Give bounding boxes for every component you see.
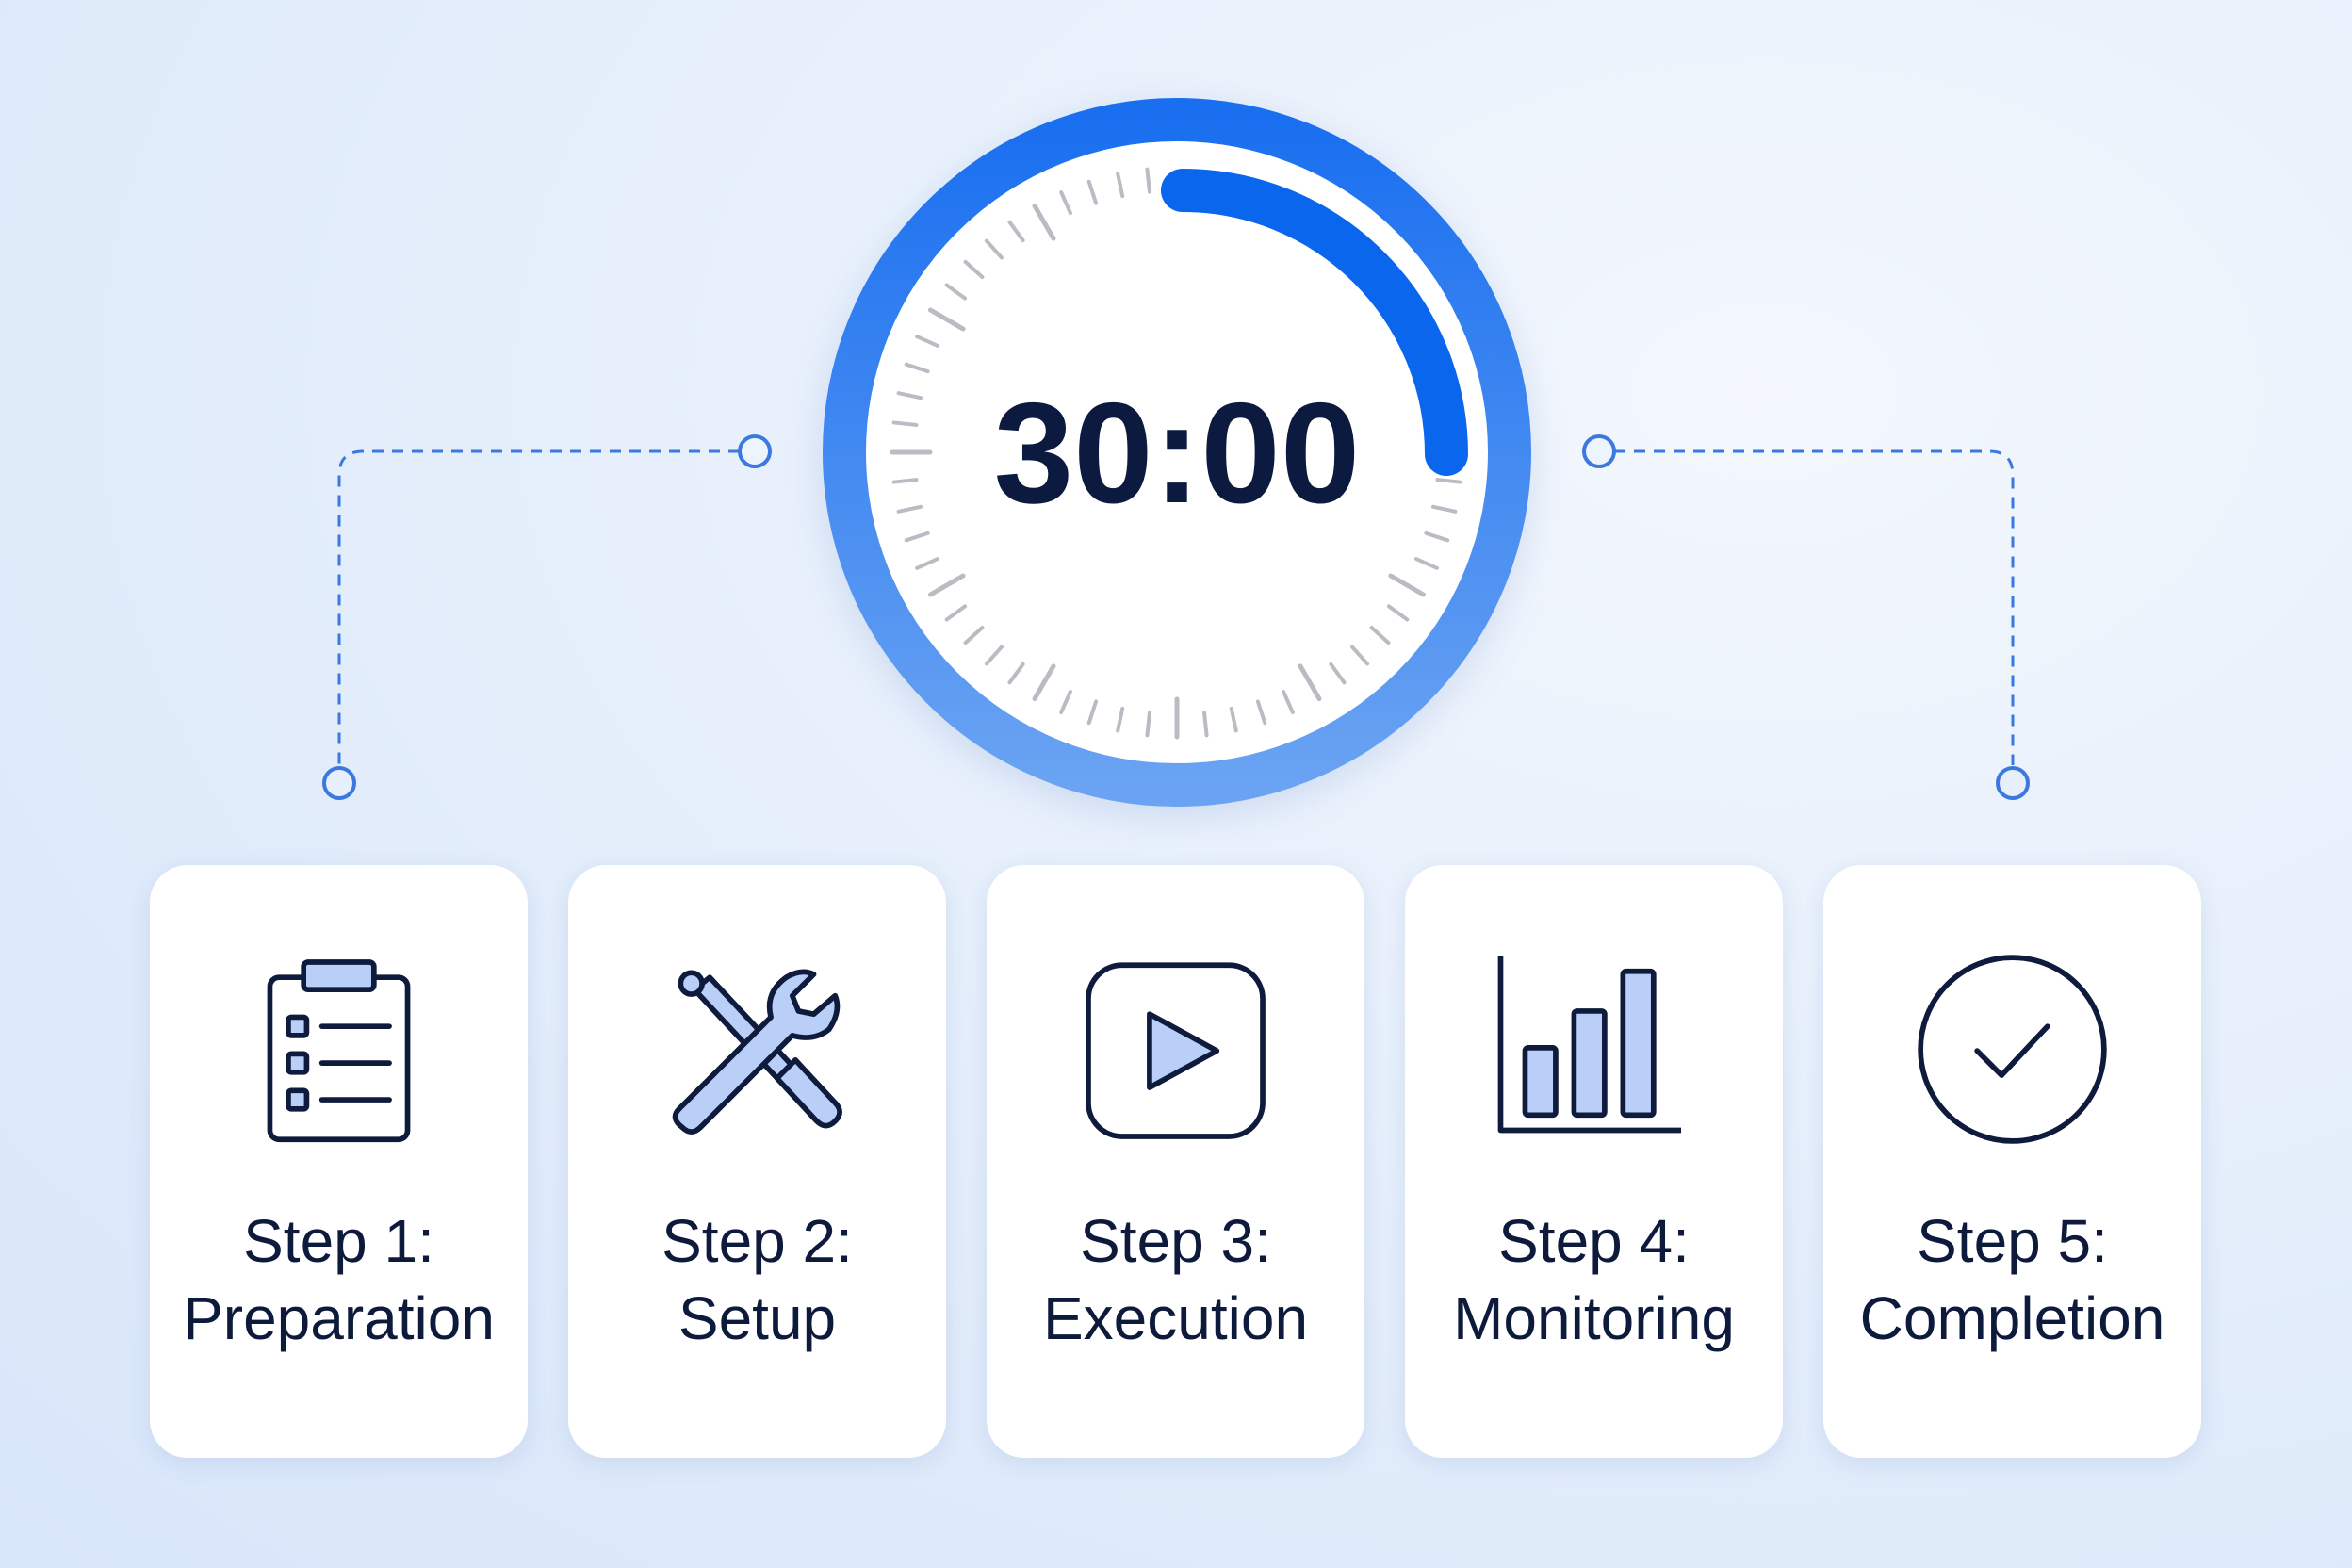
icon: check circle (1918, 955, 2107, 1144)
icon: bar chart (1498, 956, 1681, 1133)
label: step 4 (1453, 1207, 1735, 1352)
connector: right (1584, 436, 2028, 798)
label: step 2 (662, 1207, 853, 1352)
label: step 5 (1860, 1207, 2164, 1352)
label: step 1: Step 1: (243, 1207, 434, 1275)
card: step 3 (987, 865, 1364, 1458)
label: step 1: Preparation (183, 1284, 495, 1352)
timer and connectors (322, 97, 2030, 826)
label: step 2: Step 2: (662, 1207, 853, 1275)
icon: play (1086, 962, 1266, 1139)
progress arc (1183, 190, 1446, 454)
label: step 3: Step 3: (1080, 1207, 1271, 1275)
timer dial (844, 120, 1510, 785)
label: step 4: Monitoring (1453, 1284, 1735, 1352)
card: step 2 (568, 865, 946, 1458)
label: step 2: Setup (678, 1284, 836, 1352)
time text: 30:00 (994, 373, 1360, 533)
label: step 3: Execution (1043, 1284, 1308, 1352)
icon: tools (673, 969, 842, 1135)
card: step 1 (150, 865, 528, 1458)
card: step 4 (1405, 865, 1783, 1458)
label: step 5: Step 5: (1917, 1207, 2108, 1275)
label: step 5: Completion (1860, 1284, 2164, 1352)
card: step 5 (1823, 865, 2201, 1458)
icon: clipboard (268, 959, 411, 1142)
connector: left (324, 436, 770, 798)
tick marks (892, 170, 1460, 737)
label: step 3 (1043, 1207, 1308, 1352)
label: step 4: Step 4: (1498, 1207, 1690, 1275)
label: step 1 (183, 1207, 495, 1352)
